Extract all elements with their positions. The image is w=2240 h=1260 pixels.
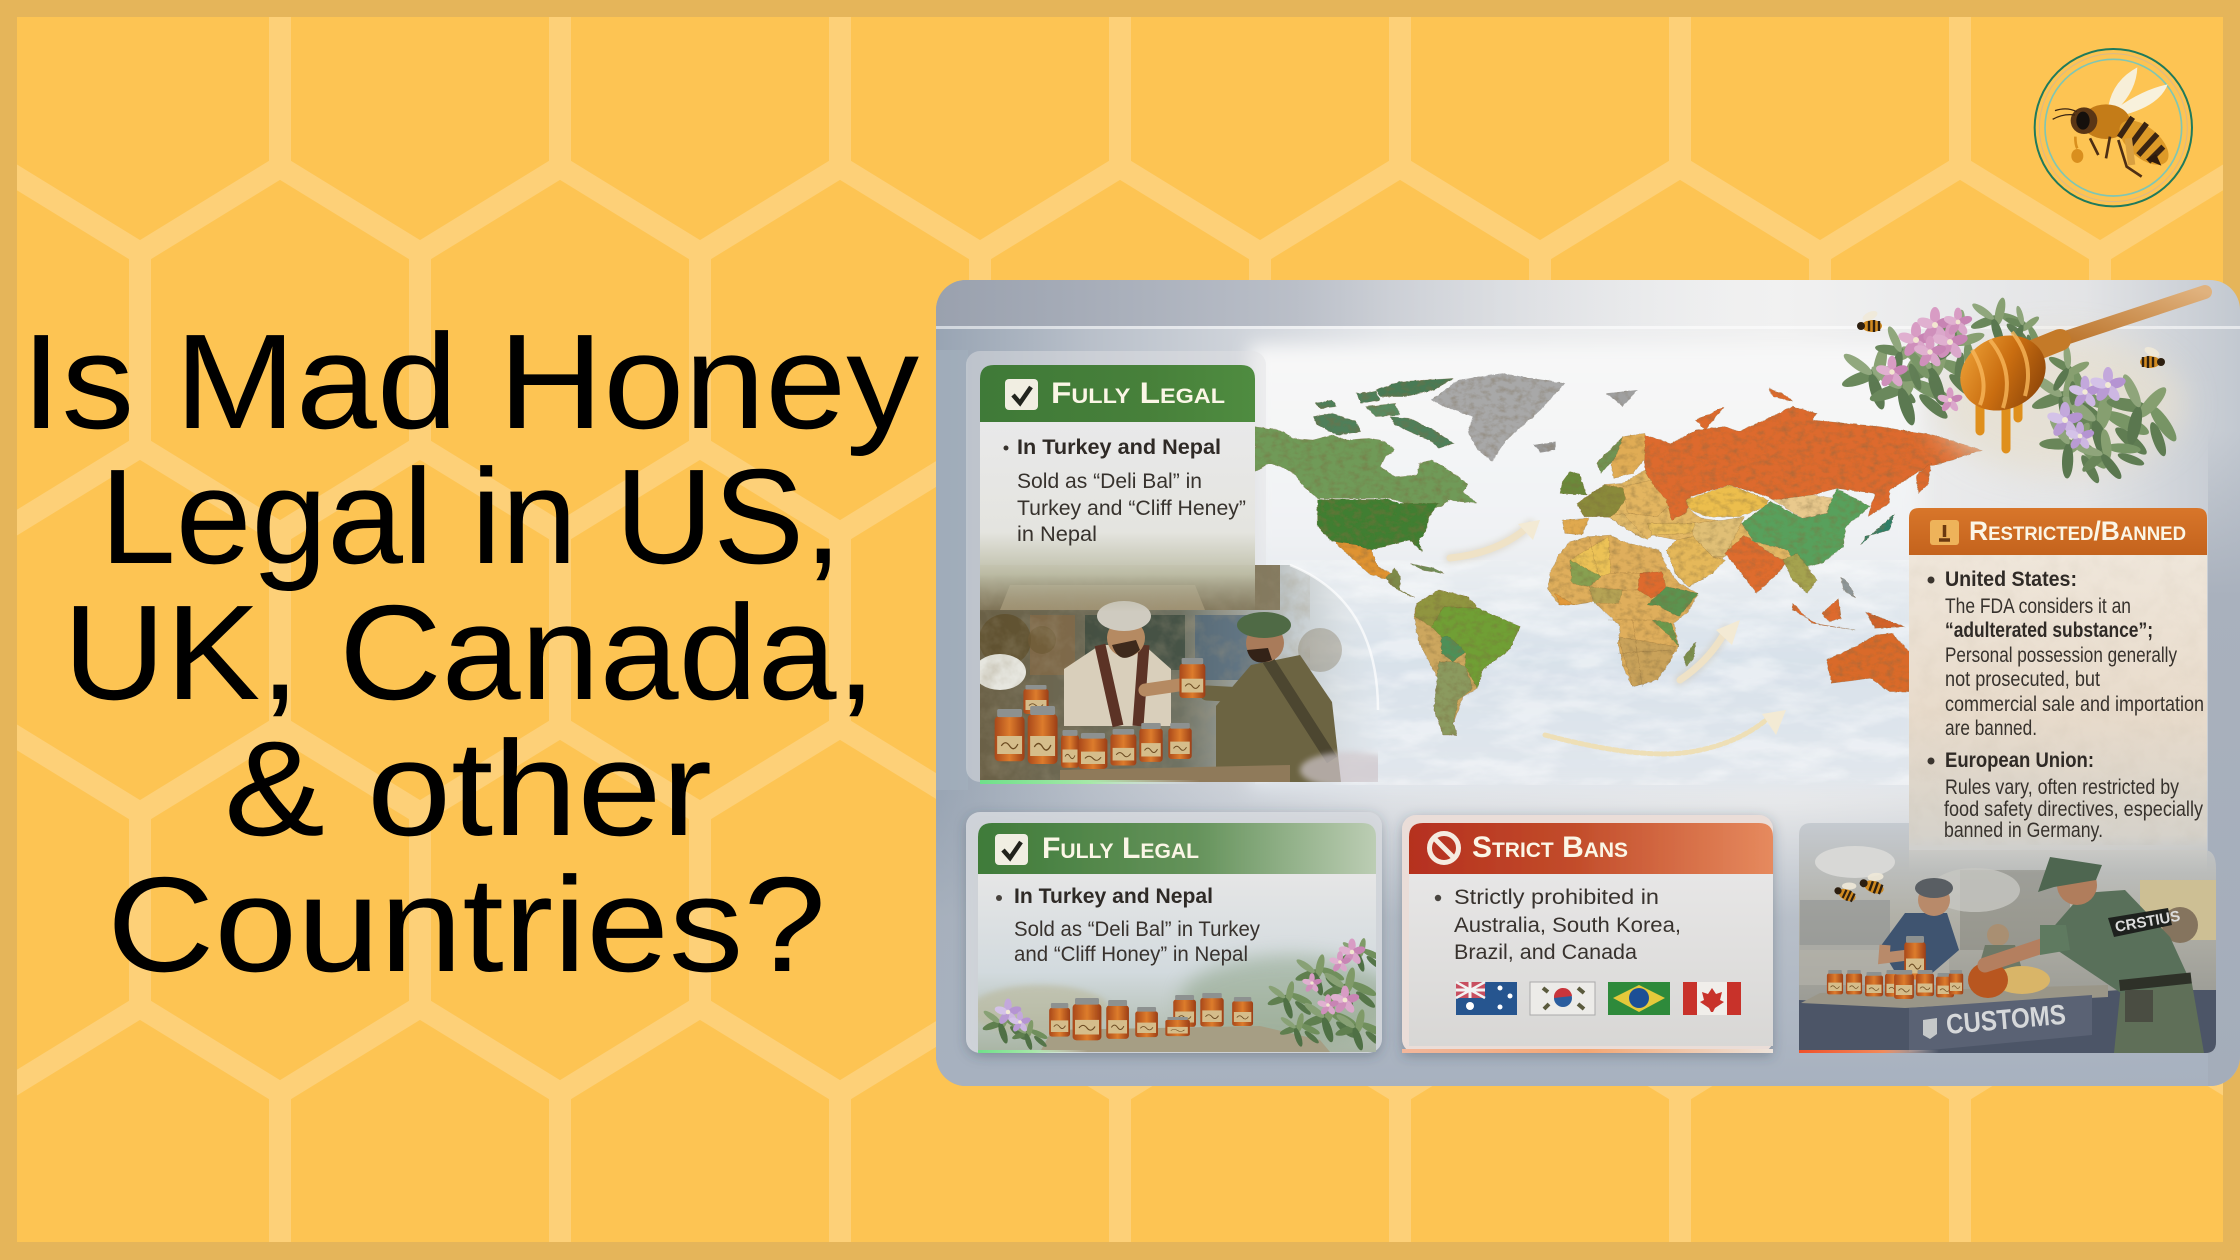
map: eurasia base land bbox=[1577, 470, 1798, 587]
header bar: Fully Legal bbox=[1051, 377, 1225, 410]
header bar bbox=[978, 823, 1376, 874]
map: africa bbox=[1548, 535, 1698, 687]
text block: united states bbox=[1928, 568, 2204, 740]
bees bbox=[1832, 866, 1889, 904]
text block: united states: Personal possession generally bbox=[1945, 644, 2177, 667]
text block: european union: banned in Germany. bbox=[1944, 819, 2103, 842]
panel background bbox=[936, 280, 2240, 1090]
map: asia bbox=[1647, 388, 1931, 630]
header bar bbox=[1909, 508, 2207, 555]
text block: and “Cliff Honey” in Nepal bbox=[1014, 943, 1248, 966]
text block: united states: are banned. bbox=[1945, 717, 2037, 740]
arrow: atlantic bbox=[1450, 520, 1540, 558]
person: customs officer bbox=[1968, 857, 2204, 1053]
text block: united states: The FDA considers it an bbox=[1945, 595, 2131, 618]
text block: in Nepal bbox=[1017, 523, 1097, 546]
text block: united states: United States: bbox=[1945, 568, 2077, 591]
text block: Turkey and “Cliff Heney” bbox=[1017, 497, 1246, 520]
card: fully legal (bottom) bbox=[966, 812, 1400, 1053]
arrow: indian ocean bbox=[1680, 620, 1740, 680]
card: restricted / banned bbox=[1909, 508, 2207, 873]
text block bbox=[1004, 436, 1246, 546]
icon: prohibition sign bbox=[1430, 834, 1458, 862]
text block: united states: commercial sale and importation bbox=[1945, 693, 2204, 716]
flowers and jars illustration bbox=[970, 937, 1400, 1052]
text block: In Turkey and Nepal bbox=[1014, 885, 1213, 908]
customs counter bbox=[1799, 985, 2216, 1053]
text block: united states: “adulterated substance”; bbox=[1945, 619, 2153, 642]
world map bbox=[1255, 373, 1982, 735]
header bar: Strict Bans bbox=[1472, 831, 1628, 864]
text block: Sold as “Deli Bal” in Turkey bbox=[1014, 918, 1260, 941]
person: merchant bbox=[1064, 601, 1186, 726]
header bar bbox=[1409, 823, 1773, 874]
text block: european union: European Union: bbox=[1945, 749, 2094, 772]
icon: warning bbox=[1930, 520, 1959, 545]
person: blue officer bbox=[1880, 878, 1959, 980]
honey jars bbox=[995, 658, 1205, 769]
logo: bee in circle bbox=[2035, 49, 2192, 206]
text block: united states: not prosecuted, but bbox=[1945, 668, 2100, 691]
title: Is Mad Honey bbox=[21, 306, 920, 457]
title: Countries? bbox=[107, 849, 826, 1000]
text block bbox=[996, 885, 1260, 966]
title: Legal in US, bbox=[100, 441, 842, 592]
text block: In Turkey and Nepal bbox=[1017, 436, 1221, 459]
flag: south korea bbox=[1530, 982, 1595, 1015]
honey dipper with flowers and bees bbox=[1840, 292, 2205, 492]
header bar: Restricted/Banned bbox=[1969, 516, 2186, 546]
text block: Strictly prohibited in bbox=[1454, 886, 1659, 909]
icon: checkbox bbox=[1005, 379, 1038, 410]
panel body bbox=[980, 422, 1255, 612]
icon: checkbox bbox=[995, 834, 1028, 865]
main panel bbox=[936, 280, 2240, 1090]
title: & other bbox=[224, 713, 712, 864]
text block: Sold as “Deli Bal” in bbox=[1017, 470, 1202, 493]
person: customs officer: CRSTIUS bbox=[2114, 908, 2182, 936]
title: UK, Canada, bbox=[63, 577, 876, 728]
market scene illustration bbox=[974, 565, 1400, 788]
text block: european union: Rules vary, often restricted by bbox=[1945, 776, 2179, 799]
flag: canada bbox=[1683, 982, 1741, 1015]
person: buyer bbox=[1207, 612, 1341, 782]
card: strict bans bbox=[1402, 815, 1773, 1053]
header bar bbox=[980, 365, 1255, 422]
arrow: southern dotted bbox=[1545, 710, 1786, 754]
map: australia bbox=[1827, 633, 1919, 692]
customs scene illustration bbox=[1799, 823, 2217, 1054]
text block bbox=[1435, 886, 1681, 964]
map: north america bbox=[1255, 378, 1478, 597]
text block: Brazil, and Canada bbox=[1454, 941, 1637, 964]
flag: australia bbox=[1456, 982, 1517, 1015]
map: europe bbox=[1560, 433, 1671, 540]
map: russia bbox=[1645, 407, 1982, 520]
map: south america bbox=[1414, 590, 1520, 735]
text block: Australia, South Korea, bbox=[1454, 914, 1681, 937]
title bbox=[21, 306, 920, 1000]
map arrows bbox=[1450, 520, 1786, 754]
text block: european union bbox=[1928, 749, 2203, 842]
honey jars on counter bbox=[1827, 970, 1963, 999]
header bar: Fully Legal bbox=[1042, 832, 1199, 865]
map: greenland and iceland bbox=[1431, 373, 1638, 462]
card: fully legal (top) bbox=[974, 365, 1400, 788]
text block: european union: food safety directives, especially bbox=[1944, 798, 2203, 821]
sign text: CUSTOMS bbox=[1945, 999, 2067, 1040]
flag: brazil bbox=[1608, 982, 1670, 1015]
